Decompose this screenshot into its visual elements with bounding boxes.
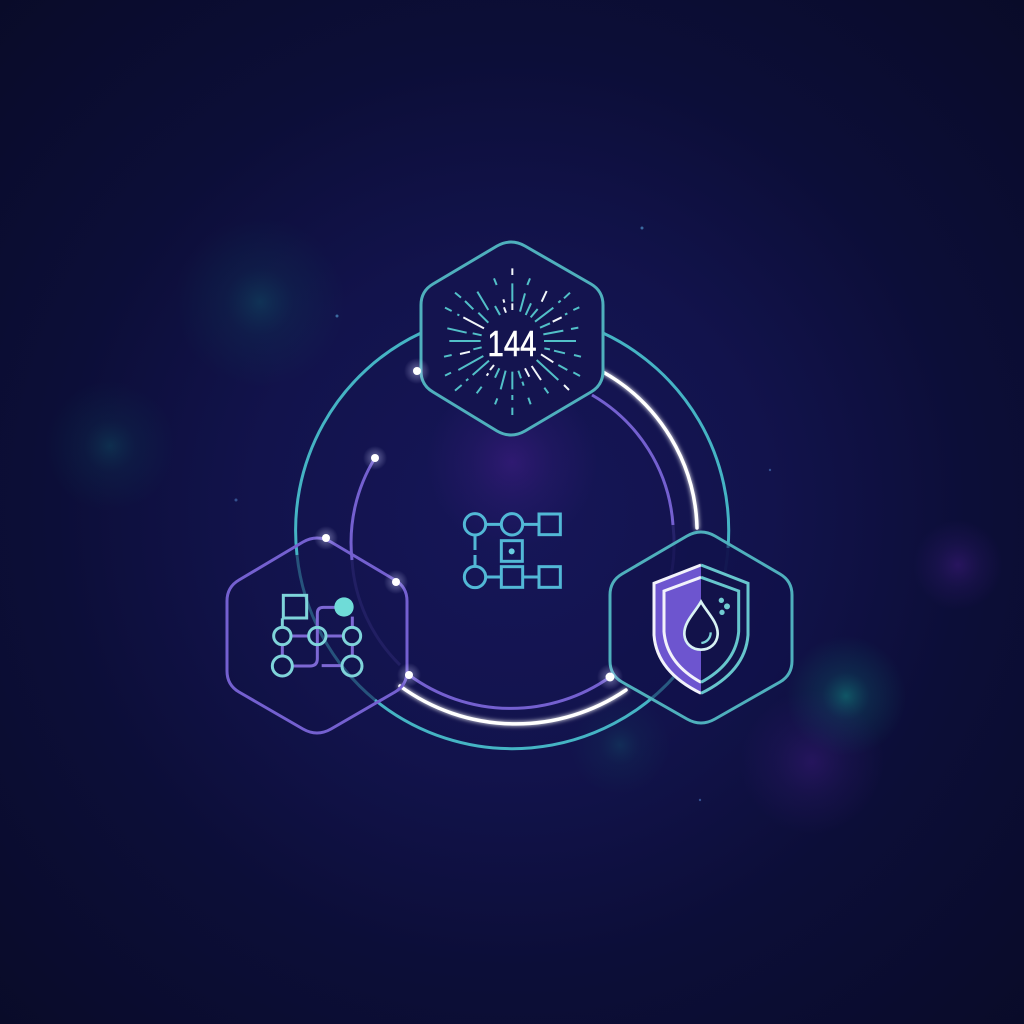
center flow diagram icon [464, 514, 560, 588]
outer teal ring [296, 333, 729, 749]
number 144: 144 [488, 323, 536, 364]
inner purple ring [351, 395, 674, 708]
hexagon: 144 [421, 242, 603, 435]
hexagon: network nodes [227, 538, 407, 733]
white progress arcs [400, 372, 697, 724]
starburst rays [444, 268, 581, 415]
hexagon: shield [610, 532, 792, 723]
shield with water drop icon [654, 565, 748, 693]
glowing node dots [314, 358, 623, 690]
network diagram icon [272, 595, 362, 676]
